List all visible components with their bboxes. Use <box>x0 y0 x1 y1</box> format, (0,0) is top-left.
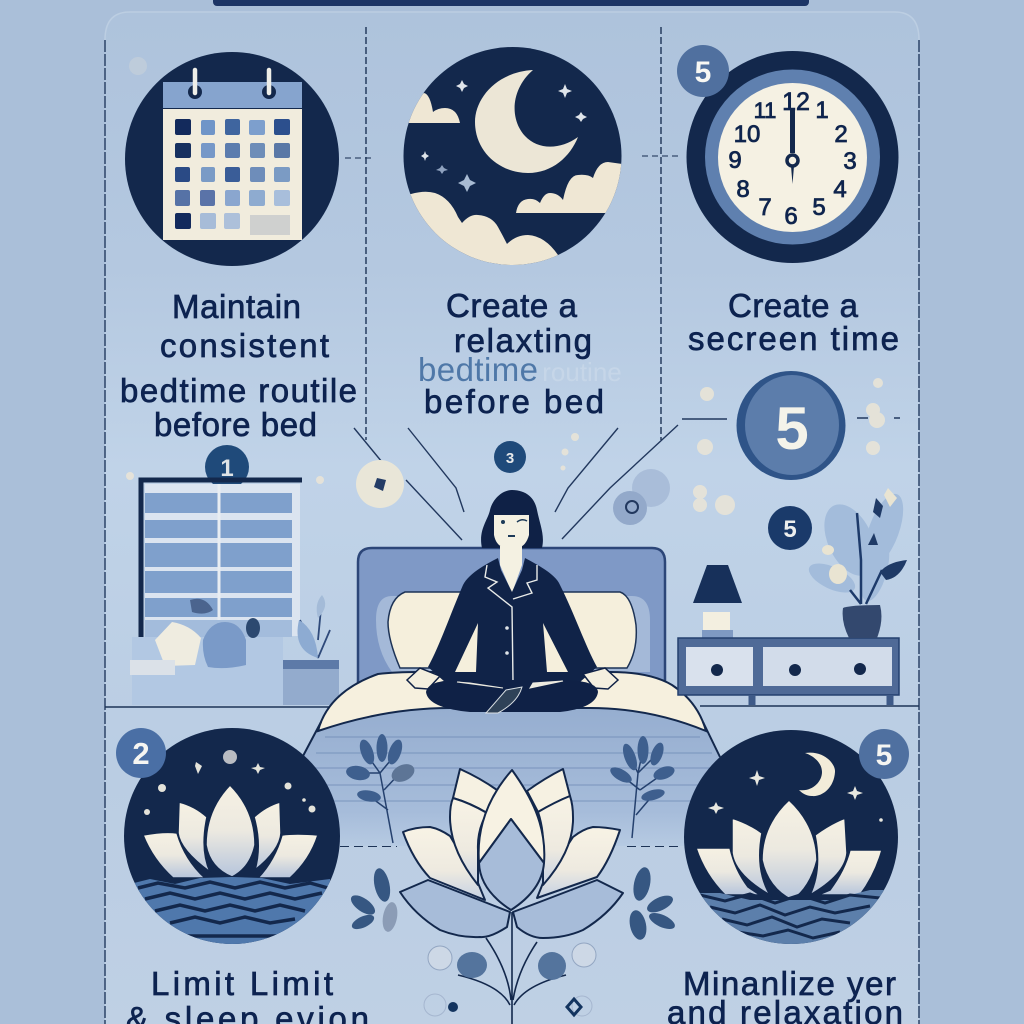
text: limit sleep: Limit Limit <box>151 965 333 1002</box>
text: create a screen time <box>688 287 899 357</box>
badge: 5 lower right: 5 <box>876 739 892 772</box>
title bar remnant <box>213 0 809 6</box>
clock numerals: 5 <box>812 194 826 221</box>
pillows <box>388 592 636 668</box>
night circle <box>684 730 898 944</box>
clock numerals: 1 <box>815 97 829 124</box>
clock hands <box>787 108 798 184</box>
outer petals <box>403 827 485 900</box>
clock numerals: 6 <box>784 203 798 230</box>
badge: large 5 <box>736 371 846 480</box>
clock numerals <box>728 88 857 230</box>
clock numerals: 11 <box>754 98 776 123</box>
lower leaves and buds <box>424 943 596 1016</box>
torso and arms <box>428 558 597 682</box>
clock numerals: 12 <box>782 88 810 116</box>
panel: lotus left <box>124 728 340 950</box>
text: create a relaxing bedtime: bedtime <box>418 351 538 388</box>
wall unit under window <box>132 637 283 705</box>
clock face <box>718 83 867 232</box>
clock numerals: 3 <box>843 148 857 175</box>
badge: 5 lower right <box>859 729 909 779</box>
crescent moon <box>475 70 578 173</box>
column dividers <box>105 27 919 846</box>
connector lines to person <box>354 418 900 540</box>
clock numerals: 8 <box>736 176 750 203</box>
stars <box>144 750 316 815</box>
central lotus <box>400 769 623 1024</box>
night circle <box>124 728 340 944</box>
petals <box>143 785 318 878</box>
water waves <box>134 877 330 944</box>
blanket and bed <box>296 672 728 846</box>
dark leaves <box>868 498 907 580</box>
panel: moon <box>404 47 622 265</box>
calendar header <box>163 82 302 108</box>
sideboard <box>678 638 899 705</box>
face <box>494 515 529 548</box>
badge: 5 top right: 5 <box>695 56 711 89</box>
window frame <box>141 480 302 640</box>
pajama piping <box>485 565 537 682</box>
clouds <box>408 93 622 265</box>
decorative blobs <box>356 460 670 525</box>
bed headboard <box>358 548 665 685</box>
middle petals <box>450 798 487 885</box>
clock numerals: 9 <box>728 147 742 174</box>
text: maintain consistent bedtime: bedtime routile <box>120 372 357 409</box>
clock numerals: 2 <box>834 121 848 148</box>
panel: clock <box>686 51 898 263</box>
stem <box>458 912 566 1024</box>
person meditating <box>407 490 618 713</box>
window <box>141 480 302 640</box>
badge: step left <box>205 445 249 489</box>
panel: lotus right <box>684 730 898 950</box>
night circle <box>404 47 622 265</box>
plant stems <box>850 513 882 604</box>
arm gaps <box>455 623 568 672</box>
badge: step left: 1 <box>220 455 234 482</box>
badge: step right: 5 <box>783 516 797 543</box>
cream blossoms <box>822 488 897 584</box>
small decorative dots <box>126 57 885 515</box>
text: maintain consistent bedtime: before bed <box>154 406 317 443</box>
text: create a screen time: secreen time <box>688 320 899 357</box>
leaf sprigs <box>345 734 677 941</box>
clock numerals: 4 <box>833 176 847 203</box>
clock outer ring <box>686 51 898 263</box>
badge: 5 top right <box>677 45 729 97</box>
flower pot <box>843 605 881 638</box>
plant on sideboard <box>805 488 911 638</box>
quilt stitching <box>302 737 722 801</box>
hair <box>481 490 543 548</box>
neck <box>500 546 522 593</box>
text: create a relaxing bedtime: Create a <box>446 287 578 324</box>
text: maintain consistent bedtime: Maintain <box>172 288 301 325</box>
center petal <box>479 770 544 863</box>
trouser highlights and foot <box>457 681 563 688</box>
face details <box>501 520 527 537</box>
calendar rings <box>188 70 276 99</box>
text: create a relaxing bedtime: relaxting <box>454 322 592 359</box>
clock numerals: 7 <box>758 194 772 221</box>
text: minimize and relaxation: Minanlize yer <box>683 965 896 1002</box>
text: maintain consistent bedtime: consistent <box>160 327 329 364</box>
pale foliage <box>805 489 911 604</box>
stars <box>708 770 883 822</box>
lamp <box>693 565 742 638</box>
text: minimize and relaxation <box>667 965 903 1024</box>
main panel frame <box>105 12 919 1024</box>
text: create a relaxing bedtime <box>418 287 622 420</box>
panel: calendar <box>125 52 339 266</box>
badge: step center <box>494 441 526 473</box>
calendar page <box>163 109 302 240</box>
cream blanket <box>318 672 706 731</box>
crossed legs <box>426 680 598 712</box>
side table and plant <box>283 595 339 705</box>
badge: 2 lower left <box>116 728 166 778</box>
text: create a screen time: Create a <box>728 287 859 324</box>
calendar circle <box>125 52 339 266</box>
badge: step right <box>768 506 812 550</box>
text: limit sleep <box>126 965 369 1024</box>
petals <box>696 800 882 900</box>
text: create a relaxing bedtime: routine <box>542 357 622 387</box>
back pillows <box>376 596 650 672</box>
calendar day grid <box>175 119 290 235</box>
text: create a relaxing bedtime: before bed <box>424 383 604 420</box>
buttons <box>505 626 509 655</box>
badge: 2 lower left: 2 <box>132 736 150 771</box>
bed edge lines <box>303 722 720 757</box>
back petals <box>453 769 497 813</box>
window panes <box>145 484 300 636</box>
water waves <box>700 890 884 944</box>
crescent moon <box>799 753 835 796</box>
text: maintain consistent bedtime <box>120 288 357 443</box>
window-side clutter <box>130 618 260 675</box>
stars <box>421 80 587 192</box>
lotus heart <box>479 819 544 910</box>
badge: large 5: 5 <box>775 395 809 462</box>
quilt <box>296 708 728 846</box>
badge: step center: 3 <box>506 450 514 467</box>
hands <box>407 668 440 689</box>
clock numerals: 10 <box>734 121 760 148</box>
lower petals <box>400 880 510 937</box>
